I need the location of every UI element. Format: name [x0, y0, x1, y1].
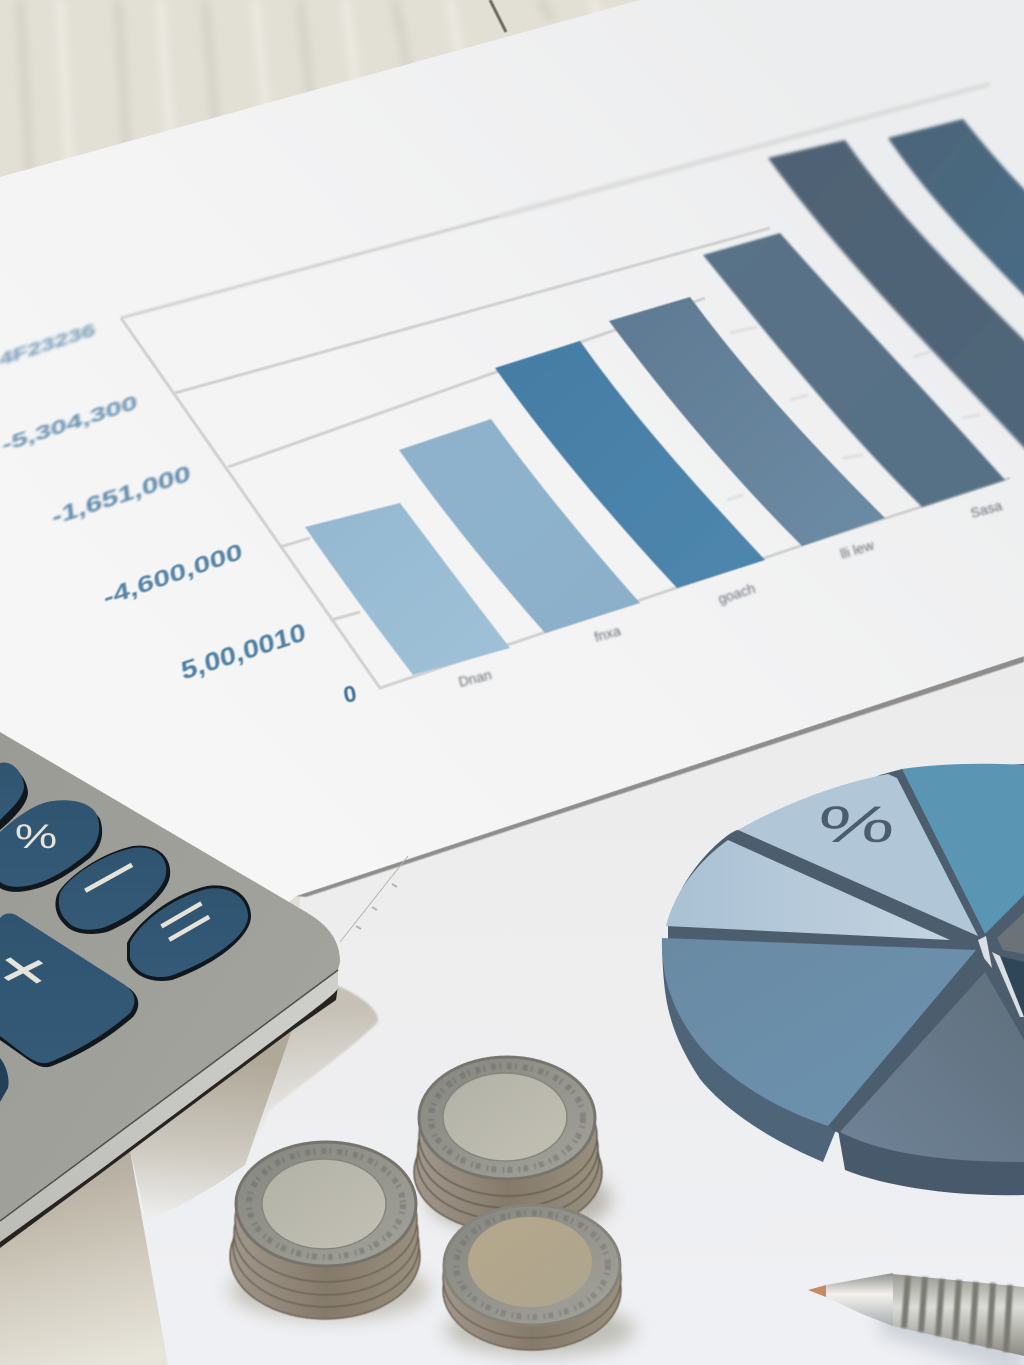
- key: top-left partial: [0, 763, 28, 830]
- light left slice: [666, 840, 950, 940]
- minus glyph: −: [63, 830, 154, 925]
- coin stack: back: [414, 1057, 612, 1234]
- dark centre slice: [1000, 956, 1024, 1017]
- label: goach: goach: [716, 580, 757, 607]
- label: -4,600,000: -4,600,000: [102, 537, 244, 611]
- bar 7: [888, 119, 1024, 312]
- bar 6: [768, 140, 1024, 465]
- bar 5: [703, 233, 1005, 507]
- pie centre highlight: [978, 936, 1024, 1017]
- calculator: [0, 732, 340, 1248]
- coin stack: left: [230, 1142, 430, 1320]
- coin stack: front: [443, 1205, 635, 1356]
- bar 2: [399, 419, 640, 633]
- pen ridged grip: [893, 1274, 1024, 1356]
- pie side wall, left: [662, 950, 838, 1162]
- key: equals: [127, 877, 251, 981]
- bar 1: [305, 503, 510, 675]
- faint ruler marks on the paper fold: [340, 856, 408, 942]
- label: top value: 4F23236: [0, 319, 96, 370]
- label: Sasa: Sasa: [969, 497, 1004, 521]
- light slice with percent sign: [738, 774, 978, 936]
- percent glyph: %: [15, 818, 57, 855]
- key: percent: [0, 800, 102, 892]
- upper paper sheet with bar chart: [0, 0, 1024, 960]
- label: -5,304,300: -5,304,300: [1, 391, 138, 457]
- calculator underside shadow: [0, 986, 338, 1248]
- pie slice gaps: [668, 764, 1024, 1136]
- label: 0: 0: [341, 680, 358, 708]
- teal slice: [902, 764, 1024, 934]
- key: minus: [55, 830, 170, 934]
- pen cone: [826, 1273, 893, 1326]
- equals glyph: =: [143, 877, 226, 965]
- calculator cast shadow on paper: [245, 985, 378, 1165]
- pie side wall, right: [838, 1130, 1024, 1195]
- percent sign: %: [815, 796, 898, 854]
- grey upper-right slice: [997, 913, 1024, 954]
- pen tip: [808, 1285, 826, 1297]
- label: 5,00,0010: 5,00,0010: [179, 617, 308, 685]
- large mid-blue slice: [662, 938, 976, 1126]
- pie chart: [662, 764, 1024, 1195]
- under-sheet wedge in calculator shadow: [130, 1030, 292, 1220]
- chart axes and gridlines: [121, 84, 1010, 688]
- x-axis labels: [457, 497, 1004, 690]
- grey lower slice: [840, 972, 1024, 1162]
- bar 4: [609, 297, 885, 546]
- lower paper sheet: [130, 650, 1024, 1365]
- key: lower-left partial: [0, 1058, 9, 1102]
- calculator top surface: [0, 732, 340, 1221]
- label: -1,651,000: -1,651,000: [51, 460, 192, 530]
- label: Dnan: Dnan: [457, 666, 493, 690]
- wooden table corner, lower left: [0, 1150, 168, 1365]
- pen: [808, 1273, 1024, 1365]
- key: plus: [0, 913, 138, 1067]
- label: lli lew: lli lew: [838, 536, 876, 562]
- label: fnxa: fnxa: [592, 622, 622, 645]
- bar 3: [495, 341, 765, 588]
- y-axis labels: [0, 319, 358, 708]
- calculator lower side: [0, 968, 338, 1242]
